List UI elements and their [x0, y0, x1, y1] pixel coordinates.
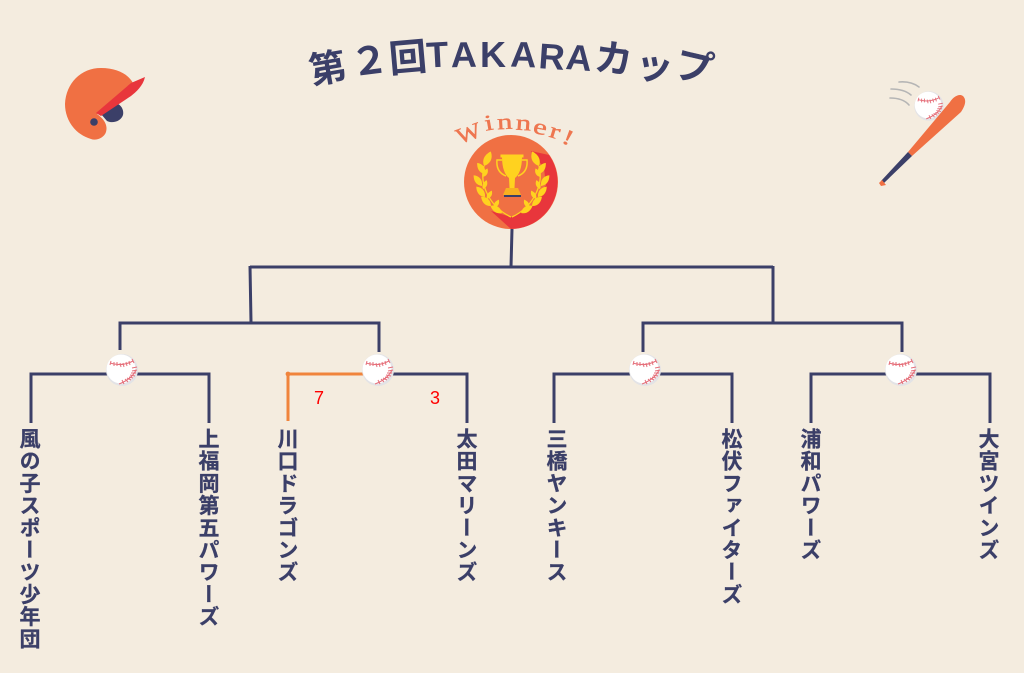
score: 7: 7	[314, 388, 324, 408]
icon: winner lettering: !	[558, 124, 578, 151]
title: ２	[347, 28, 391, 87]
baseball: match 4	[885, 354, 917, 386]
title: A	[450, 34, 477, 75]
bracket lines	[31, 229, 990, 423]
score: 3: 3	[430, 388, 440, 408]
team: 川口ドラゴンズ: 川口ドラゴンズ	[273, 428, 303, 583]
icon: winner lettering	[453, 109, 578, 151]
icon: winner lettering: r	[547, 118, 564, 144]
title: プ	[670, 33, 719, 95]
icon: bat and ball	[879, 82, 965, 186]
title: T	[425, 33, 449, 76]
baseball: match 1	[106, 354, 138, 386]
icon: winner trophy badge	[464, 135, 558, 229]
icon: winner lettering: e	[531, 113, 549, 140]
baseball: match 3	[629, 354, 661, 386]
team: 浦和パワーズ: 浦和パワーズ	[796, 428, 826, 561]
team: 三橋ヤンキース: 三橋ヤンキース	[542, 428, 572, 583]
team: 風の子スポーツ少年団: 風の子スポーツ少年団	[15, 428, 45, 650]
team: 上福岡第五パワーズ: 上福岡第五パワーズ	[194, 428, 224, 628]
baseball: match 2	[362, 354, 394, 386]
team: 太田マリーンズ: 太田マリーンズ	[452, 428, 482, 583]
team: 松伏ファイターズ: 松伏ファイターズ	[717, 428, 747, 606]
icon: winner lettering: i	[482, 110, 495, 136]
icon: batting helmet	[65, 68, 145, 140]
title: カ	[592, 26, 636, 85]
icon: winner lettering: n	[515, 110, 532, 135]
title: A	[564, 36, 594, 79]
icon: winner lettering: W	[453, 118, 485, 149]
title: R	[537, 35, 566, 78]
title: A	[510, 34, 537, 75]
title: 回	[386, 26, 429, 84]
icon: winner lettering: n	[496, 109, 513, 134]
title: K	[480, 34, 506, 75]
team: 大宮ツインズ: 大宮ツインズ	[974, 428, 1004, 561]
title	[304, 26, 719, 95]
highlighted winner path	[286, 372, 368, 421]
title: 第	[304, 35, 350, 95]
title: ッ	[631, 32, 678, 93]
